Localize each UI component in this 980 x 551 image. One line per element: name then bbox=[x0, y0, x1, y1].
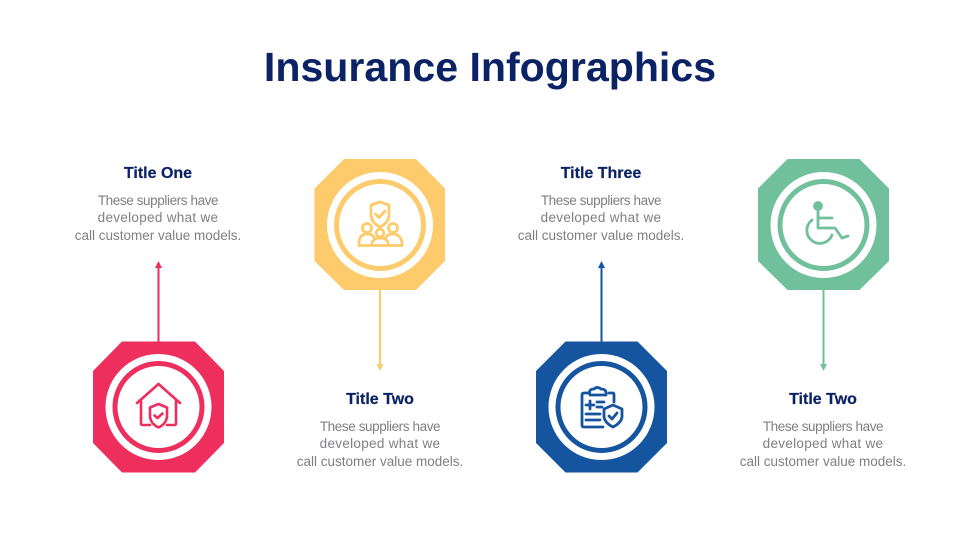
title: Insurance Infographics bbox=[264, 44, 716, 90]
text block: title three bbox=[518, 165, 684, 243]
body text: title one bbox=[75, 193, 241, 243]
body text: title one: call customer value models. bbox=[75, 228, 241, 243]
heading: title one: Title One bbox=[124, 165, 192, 182]
body text: title two, second: These suppliers have bbox=[763, 419, 883, 434]
panel: blue octagon badge bbox=[536, 342, 667, 472]
body text: title one: These suppliers have bbox=[98, 193, 218, 208]
text block: title two, first bbox=[297, 391, 463, 469]
icon: people with shield bbox=[359, 202, 402, 246]
body text: title three: developed what we bbox=[541, 210, 661, 225]
body text: title two, second: call customer value models. bbox=[740, 454, 906, 469]
body text: title two, second: developed what we bbox=[763, 436, 883, 451]
body text: title three bbox=[518, 193, 684, 243]
arrow: red up bbox=[155, 261, 162, 342]
icon: wheelchair bbox=[807, 202, 848, 243]
heading: title three: Title Three bbox=[561, 165, 641, 182]
icon: clipboard with shield bbox=[582, 388, 622, 427]
arrow: blue up bbox=[598, 261, 605, 342]
heading: title two, second: Title Two bbox=[789, 391, 857, 408]
heading: title two, first: Title Two bbox=[346, 391, 414, 408]
body text: title one: developed what we bbox=[98, 210, 218, 225]
body text: title two, second bbox=[740, 419, 906, 469]
panel: red octagon badge bbox=[93, 342, 224, 472]
panel: yellow octagon badge bbox=[314, 159, 445, 290]
text block: title two, second bbox=[740, 391, 906, 469]
panel: green octagon badge bbox=[758, 159, 889, 290]
body text: title two, first bbox=[297, 419, 463, 469]
body text: title three: These suppliers have bbox=[541, 193, 661, 208]
body text: title three: call customer value models. bbox=[518, 228, 684, 243]
arrow: green down bbox=[820, 290, 827, 371]
icon: house with shield bbox=[137, 384, 180, 428]
body text: title two, first: call customer value models. bbox=[297, 454, 463, 469]
arrow: yellow down bbox=[376, 290, 384, 371]
text block: title one bbox=[75, 165, 241, 243]
body text: title two, first: developed what we bbox=[320, 436, 440, 451]
body text: title two, first: These suppliers have bbox=[320, 419, 440, 434]
